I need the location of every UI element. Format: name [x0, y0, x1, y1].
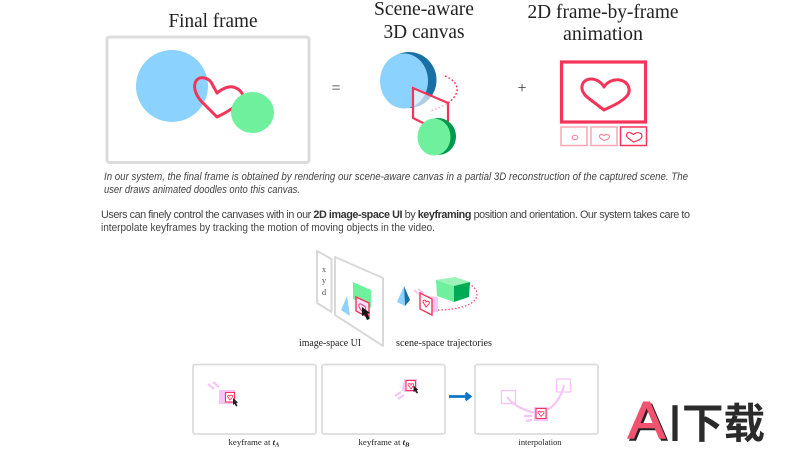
start square — [502, 390, 516, 404]
dotted trajectory — [438, 283, 477, 310]
panel: scene-aware canvas — [380, 52, 457, 156]
heading: scene-aware 3D canvas: 3D canvas — [384, 21, 465, 43]
cursor — [414, 386, 418, 394]
xyd panel: d — [322, 287, 327, 297]
main frame — [562, 62, 646, 122]
xyd panel: y — [322, 275, 327, 285]
heading: scene-aware 3D canvas — [374, 0, 474, 43]
label: image-space UI: image-space UI — [299, 338, 361, 349]
main heart — [582, 79, 629, 110]
panel: keyframe A — [193, 364, 316, 434]
xyd panel: x — [322, 264, 327, 274]
heading: final frame: Final frame — [168, 10, 258, 32]
doodle frame — [536, 408, 546, 418]
diagram: scene-space trajectories — [397, 277, 477, 315]
caption: user draws animated doodles onto this canvas. — [104, 184, 300, 196]
body paragraph: Users can finely control the canvases with in our 2D image-space UI by keyframing position and orientation. Our system takes care to — [101, 209, 690, 221]
label: keyframe B: keyframe at t — [358, 438, 405, 447]
heading: 2D frame-by-frame animation: animation — [563, 23, 643, 45]
green cube — [436, 277, 470, 302]
thumbnail 1 — [561, 127, 587, 146]
equals sign: = — [331, 80, 341, 97]
body paragraph: interpolate keyframes by tracking the motion of moving objects in the video. — [101, 222, 435, 234]
end square — [556, 379, 570, 392]
plus sign: + — [517, 80, 527, 97]
faded dotted trajectory — [431, 104, 447, 111]
pink square — [534, 407, 548, 421]
green sphere with dark side — [418, 118, 456, 156]
interpolation curve — [507, 385, 564, 421]
body paragraph — [101, 209, 690, 234]
canvas plane — [413, 88, 448, 125]
panel: final frame — [107, 37, 309, 162]
blue pyramid — [397, 286, 410, 306]
doodle frame — [226, 392, 234, 402]
blue sphere with dark side — [380, 52, 436, 108]
doodle frame — [356, 297, 369, 318]
faded trail — [414, 289, 423, 294]
arrow — [449, 393, 470, 400]
label: scene-space trajectories: scene-space trajectories — [396, 338, 492, 349]
blue circle — [136, 50, 208, 122]
cursor — [233, 398, 238, 406]
pink square — [404, 379, 417, 392]
caption — [104, 171, 688, 196]
thumbnail 2 — [591, 127, 617, 146]
pink square — [219, 390, 235, 404]
diagram: image-space UI — [317, 251, 383, 346]
label: keyframe A: keyframe at t — [228, 438, 275, 447]
doodle frame — [406, 380, 416, 390]
label: keyframe B: B — [404, 442, 410, 448]
trail strokes — [395, 383, 404, 399]
doodle frame — [420, 293, 432, 315]
heading: 2D frame-by-frame animation — [528, 1, 679, 45]
thumbnail 3 — [620, 127, 646, 146]
trail strokes — [208, 382, 219, 389]
caption: In our system, the final frame is obtained by rendering our scene-aware canvas in a partial 3D reconstruction of the captured scene. The — [104, 171, 688, 183]
panel: interpolation — [475, 364, 598, 434]
xyd panel — [317, 251, 332, 312]
label: keyframe A: A — [274, 442, 280, 448]
watermark: 下载 — [682, 400, 765, 447]
green circle — [231, 92, 274, 133]
main plane — [335, 257, 383, 346]
panel: frame-by-frame animation — [561, 62, 646, 146]
watermark — [628, 392, 765, 450]
watermark: A — [628, 392, 665, 450]
heading: 2D frame-by-frame animation: 2D frame-by-frame — [528, 1, 679, 23]
panel: keyframe B — [322, 364, 445, 434]
blue triangle projection — [341, 296, 350, 316]
pink shadow square — [426, 296, 438, 312]
doodle heart — [195, 78, 243, 117]
label: interpolation: interpolation — [518, 438, 562, 447]
green rectangle projection — [353, 282, 371, 308]
dotted trajectory — [445, 76, 457, 103]
cursor — [362, 307, 370, 320]
